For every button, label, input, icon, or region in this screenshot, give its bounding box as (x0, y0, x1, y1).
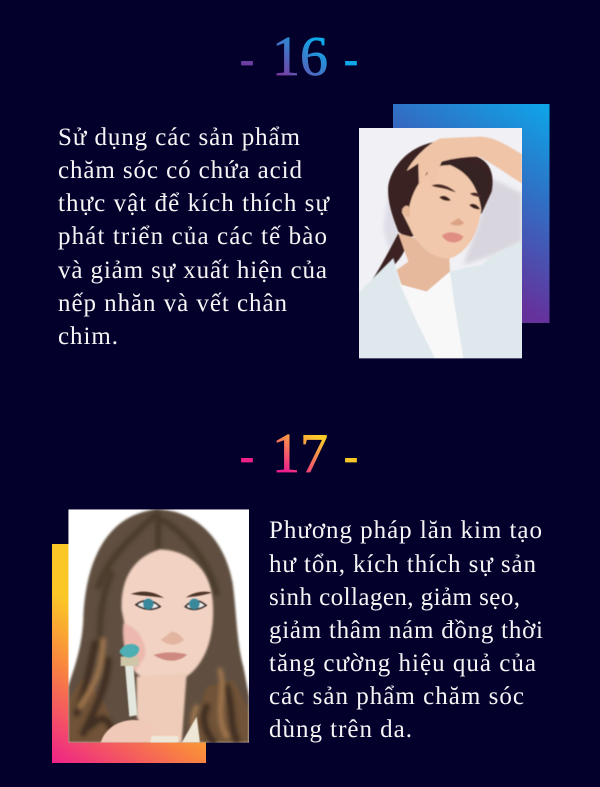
text block: tip 16: nếp nhăn và vết chân (58, 290, 288, 317)
text block: tip 17: hư tổn, kích thích sự sản (269, 551, 536, 578)
gradient panel behind photo 16 (393, 104, 550, 323)
text block: tip 16: chim. (58, 323, 118, 350)
text block: tip 16 (58, 124, 330, 350)
text block: tip 17: dùng trên da. (269, 716, 412, 743)
gradient panel behind photo 17 (52, 544, 206, 763)
photo: woman with hand on forehead (359, 128, 522, 358)
text block: tip 17: giảm thâm nám đồng thời (269, 617, 543, 644)
text block: tip 17: các sản phẩm chăm sóc (269, 683, 524, 710)
text block: tip 17 (269, 517, 543, 743)
text block: tip 16: và giảm sự xuất hiện của (58, 257, 327, 284)
photo: woman with derma roller (68, 509, 249, 743)
text block: tip 17: Phương pháp lăn kim tạo (269, 517, 542, 544)
text block: tip 16: phát triển của các tế bào (58, 223, 327, 250)
heading: number 16: 16 (272, 26, 328, 88)
heading: number 16 (240, 26, 358, 88)
heading: number 17: 17 (272, 423, 328, 485)
heading: number 16: - (344, 37, 358, 83)
text block: tip 16: chăm sóc có chứa acid (58, 157, 302, 184)
text block: tip 16: thực vật để kích thích sự (58, 190, 330, 217)
text block: tip 17: tăng cường hiệu quả của (269, 650, 536, 677)
heading: number 17: - (344, 434, 358, 480)
heading: number 16: - (240, 37, 254, 83)
text block: tip 17: sinh collagen, giảm sẹo, (269, 584, 520, 611)
text block: tip 16: Sử dụng các sản phẩm (58, 124, 301, 151)
heading: number 17 (240, 423, 358, 485)
heading: number 17: - (240, 434, 254, 480)
